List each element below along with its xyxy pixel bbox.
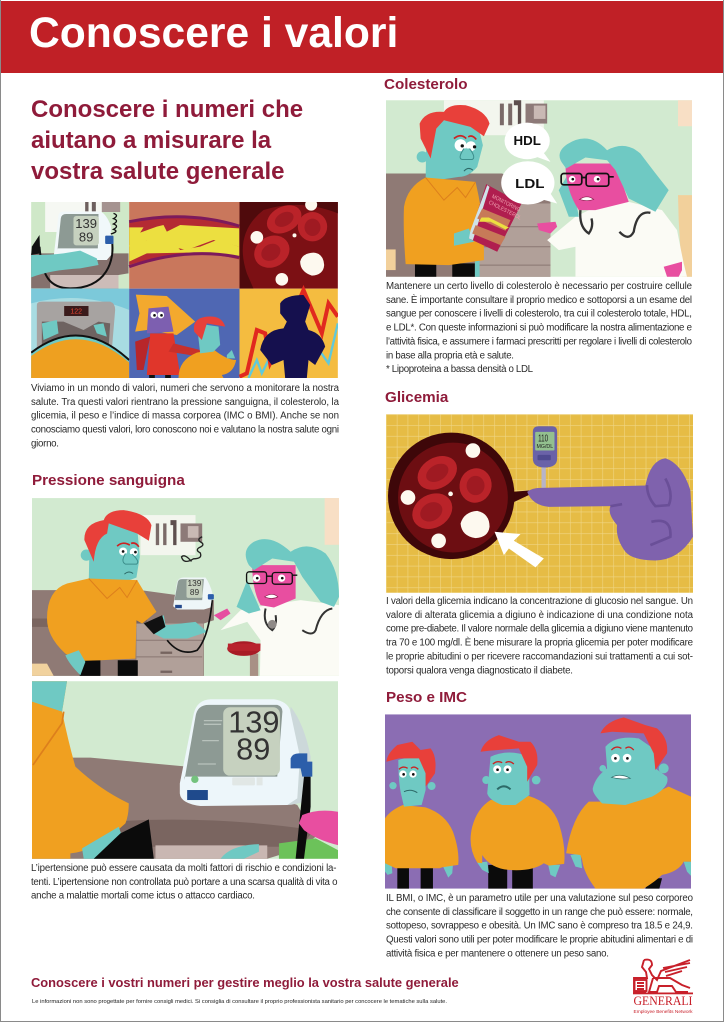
speech bubble: HDL: HDL bbox=[514, 134, 541, 148]
monitor close-up: 139 bbox=[228, 705, 280, 740]
illustration: patient and doctor measuring blood pressure bbox=[32, 498, 339, 676]
illustration: three body sizes bbox=[385, 714, 691, 889]
logo: Generali lion: Employee Benefits Network bbox=[634, 1009, 693, 1015]
book: MONITORING bbox=[491, 194, 521, 214]
large figure bbox=[566, 717, 691, 889]
panel: blood pressure monitor: 139 bbox=[75, 216, 97, 231]
monitor: 139 bbox=[188, 578, 202, 588]
glucose text bbox=[386, 596, 694, 676]
speech bubble: HDL bbox=[505, 123, 550, 162]
glucose text: valore di alterata glicemia a digiuno è indicazione di una condizione nota bbox=[386, 610, 694, 621]
logo: Generali lion bbox=[633, 958, 693, 1015]
pressure text: L’ipertensione può essere causata da molti fattori di rischio e condizioni la- bbox=[31, 862, 336, 874]
book bbox=[469, 184, 522, 252]
footer disclaimer: Le informazioni non sono progettate per fornire consigli medici. Si consiglia di consultare il proprio professionista sanitario per concocere le tematiche sulla salute. bbox=[32, 999, 447, 1005]
illustration: six-panel health values grid bbox=[31, 202, 338, 378]
panel: scale: 122 bbox=[70, 309, 82, 316]
cholesterol text: sane. È importante consultare il proprio medico e sottoporsi a un esame del bbox=[386, 295, 692, 306]
glucose text: le proprie abitudini o per ricevere raccomandazioni sui trattamenti a cui sot- bbox=[386, 651, 693, 662]
pointing hand bbox=[527, 458, 693, 560]
man bbox=[47, 510, 207, 676]
monitor close-up: 89 bbox=[236, 731, 270, 766]
glucose meter bbox=[533, 426, 557, 488]
pressure text: tenti. L’ipertensione non controllata può portare a una scarsa qualità di vita o bbox=[31, 876, 338, 887]
man bbox=[404, 105, 490, 277]
BMI text: IL BMI, o IMC, è un parametro utile per una valutazione sul peso corporeo bbox=[386, 893, 693, 904]
magnified blood circle bbox=[388, 433, 540, 559]
panel: silhouette and zigzag chart bbox=[240, 289, 338, 378]
panel: scale bbox=[31, 289, 129, 381]
cholesterol text: sangue per conoscere i livelli di colesterolo, tra cui il colesterolo totale, HDL, bbox=[386, 308, 692, 319]
monitor close-up bbox=[180, 699, 312, 859]
glucose text: come pre-diabete. Il valore normale della glicemia a digiuno viene mantenuto bbox=[386, 623, 693, 634]
BMI text bbox=[386, 893, 693, 959]
pressure text: anche a malattie mortali come ictus o attacco cardiaco. bbox=[31, 890, 255, 901]
intro text bbox=[31, 383, 340, 449]
panel: artery with plaque bbox=[129, 202, 240, 289]
speech bubble: LDL: LDL bbox=[515, 177, 545, 191]
intro text: conosciamo questi valori, loro conoscono noi e valutano la nostra salute ogni bbox=[31, 425, 339, 436]
cholesterol text bbox=[386, 281, 692, 375]
panel: blood pressure monitor: 89 bbox=[79, 229, 93, 244]
cholesterol text: * Lipoproteina a bassa densità o LDL bbox=[386, 364, 534, 375]
heading: Peso e IMC: Peso e IMC bbox=[386, 689, 467, 706]
illustration: patient with cholesterol book and doctor bbox=[386, 100, 692, 277]
cholesterol text: e LDL*. Con queste informazioni si può modificare la nostra alimentazione e bbox=[386, 322, 692, 333]
footer call to action: Conoscere i vostri numeri per gestire meglio la vostra salute generale bbox=[31, 975, 459, 990]
arrow bbox=[495, 532, 544, 567]
pressure text bbox=[31, 862, 338, 901]
BMI text: Questi valori sono utili per poter modificare le proprie abitudini alimentari e di bbox=[386, 934, 693, 945]
glucose text: I valori della glicemia indicano la concentrazione di glucosio nel sangue. Un bbox=[386, 596, 693, 607]
intro text: glicemia, il peso e l’indice di massa corporea (IMC o BMI). Anche se non bbox=[31, 411, 339, 422]
thin figure bbox=[385, 742, 458, 889]
illustration: finger blood glucose test bbox=[386, 414, 693, 593]
title banner bbox=[1, 1, 723, 73]
intro text: Viviamo in un mondo di valori, numeri che servono a monitorare la nostra bbox=[31, 383, 340, 394]
main heading bbox=[31, 96, 303, 185]
main heading: vostra salute generale bbox=[31, 158, 284, 185]
cholesterol text: Mantenere un certo livello di colesterolo è necessario per costruire cellule bbox=[386, 281, 692, 292]
monitor: 89 bbox=[190, 587, 200, 597]
speech bubble: LDL bbox=[501, 161, 557, 204]
main heading: Conoscere i numeri che bbox=[31, 96, 303, 123]
book: CHOLESTEROL bbox=[487, 200, 522, 222]
BMI text: attività fisica e per mantenere o ottenere un peso sano. bbox=[386, 948, 609, 959]
panel: blood pressure monitor bbox=[31, 202, 129, 289]
cholesterol text: l’attività fisica, e assumere i farmaci prescritti per regolare i livelli di colesterolo bbox=[386, 336, 692, 347]
glucose text: tra 70 e 100 mg/dl. È bene misurare la propria glicemia per poter modificare bbox=[386, 637, 693, 648]
panel: woman and man bbox=[129, 289, 240, 378]
heading: Glicemia: Glicemia bbox=[385, 389, 448, 406]
title banner: Conoscere i valori bbox=[29, 9, 398, 57]
BMI text: che consente di classificare il soggetto in un range che può essere: normale, bbox=[386, 907, 693, 918]
cholesterol text: in base alla propria età e salute. bbox=[386, 350, 514, 361]
medium figure bbox=[471, 735, 565, 889]
glucose text: toporsi qualora venga diagnosticato il diabete. bbox=[386, 665, 573, 676]
main heading: aiutano a misurare la bbox=[31, 127, 271, 154]
intro text: giorno. bbox=[31, 438, 59, 449]
glucose meter: MG/DL bbox=[537, 444, 553, 450]
BMI text: sottopeso, sovrappeso e obesità. Un IMC sano è compreso tra 18.5 e 24,9. bbox=[386, 920, 693, 931]
doctor bbox=[214, 539, 339, 676]
heading: Pressione sanguigna: Pressione sanguigna bbox=[32, 472, 185, 489]
panel: blood cells bbox=[240, 199, 338, 289]
monitor bbox=[173, 577, 214, 610]
illustration: close-up of blood pressure monitor bbox=[32, 681, 338, 859]
intro text: salute. Tra questi valori rientrano la pressione sanguigna, il colesterolo, la bbox=[31, 397, 340, 408]
heading: Colesterolo: Colesterolo bbox=[384, 76, 468, 93]
glucose meter: 110 bbox=[538, 434, 548, 445]
doctor bbox=[537, 138, 687, 277]
